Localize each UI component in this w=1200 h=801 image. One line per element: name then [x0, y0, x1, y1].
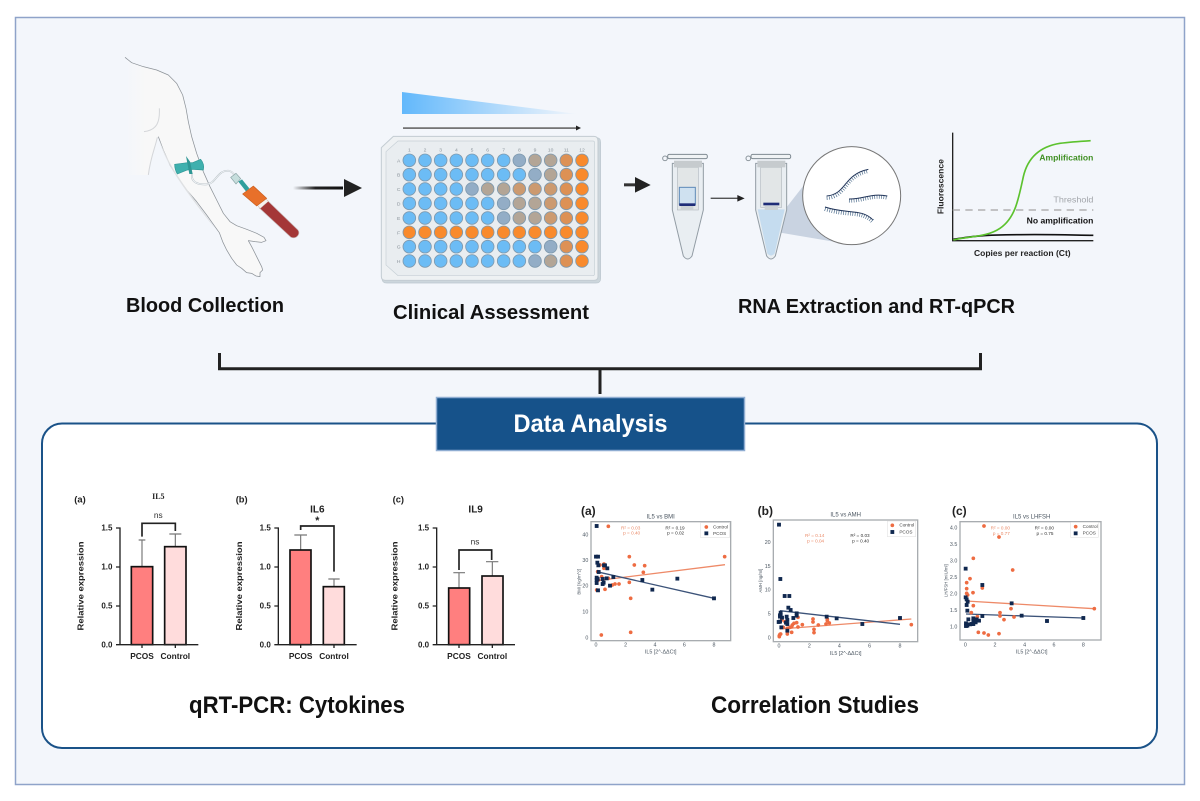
bar chart: IL5: (a): [74, 494, 86, 504]
scatter plot: IL5 vs BMI: 10: [582, 610, 588, 616]
control points: [595, 525, 726, 637]
scatter plot: IL5 vs BMI: 20: [582, 584, 588, 590]
legend: PCOS: [1083, 531, 1096, 536]
plate column numbers: A: [397, 158, 401, 164]
bar chart: IL9: 1.0: [418, 563, 430, 572]
arrow: to first tube: [624, 177, 651, 193]
blood tube: [243, 186, 299, 238]
plate column numbers: 4: [455, 148, 458, 154]
plate column numbers: 10: [548, 148, 554, 154]
heading box: Data Analysis: [436, 398, 744, 450]
scatter plot: IL5 vs LH/FSH: R² = 0.00: [1035, 526, 1054, 531]
magnified RNA circle: [803, 147, 901, 245]
bar chart: IL5: 0.0: [101, 640, 113, 649]
bar chart: IL9: Control: [478, 651, 507, 661]
bar chart: IL9: ns: [471, 536, 479, 546]
magnified view cone: [768, 185, 833, 242]
scatter plot: IL5 vs AMH: IL5 vs AMH: [830, 513, 861, 519]
bar chart: IL6: Control: [319, 651, 349, 661]
legend: [701, 523, 729, 538]
scatter plot: IL5 vs AMH: R² = 0.03: [850, 533, 870, 538]
panel: data analysis: [42, 424, 1157, 748]
PCOS points: [777, 523, 902, 632]
scatter plot: IL5 vs LH/FSH: 3.5: [950, 542, 957, 548]
arm: [125, 57, 266, 277]
bar chart: IL6: 1.5: [260, 524, 271, 533]
PCOS points: [594, 524, 716, 600]
scatter plot: IL5 vs LH/FSH: p = 0.75: [1037, 531, 1054, 536]
scatter plot: IL5 vs AMH: 5: [768, 612, 771, 618]
scatter plot: IL5 vs LH/FSH: [943, 504, 1101, 655]
scatter plot: IL5 vs BMI: 40: [582, 532, 588, 538]
scatter plot: IL5 vs BMI: (a): [581, 504, 596, 518]
heading: qRT-PCR: Cytokines: qRT-PCR: Cytokines: [189, 692, 405, 719]
scatter plot: IL5 vs AMH: (b): [758, 504, 773, 518]
scatter plot: IL5 vs AMH: IL5 [2^-ΔΔCt]: [830, 651, 862, 657]
scatter plot: IL5 vs LH/FSH: IL5 [2^-ΔΔCt]: [1016, 649, 1048, 655]
scatter plot: IL5 vs AMH: 2: [808, 644, 811, 650]
plate column numbers: 7: [502, 148, 505, 154]
plate column numbers: 6: [486, 148, 489, 154]
connector bracket: [220, 353, 980, 394]
chart: qPCR amplification curve: Amplification: [1039, 153, 1093, 162]
bar chart: IL5: 1.5: [101, 524, 113, 533]
scatter plot: IL5 vs LH/FSH: 4.0: [950, 526, 957, 532]
plate column numbers: 9: [534, 148, 537, 154]
PCOS points: [964, 567, 1085, 628]
plate wells: [403, 154, 588, 267]
bar chart: IL5: [74, 492, 198, 661]
scatter plot: IL5 vs AMH: 0: [768, 635, 771, 641]
scatter plot: IL5 vs AMH: 8: [899, 644, 902, 650]
plate column numbers: 2: [424, 148, 427, 154]
scatter plot: IL5 vs BMI: 30: [582, 558, 588, 564]
scatter plot: IL5 vs LH/FSH: 1.0: [950, 624, 957, 630]
scatter plot: IL5 vs BMI: 0: [585, 635, 588, 641]
arrow: dilution direction: [403, 126, 581, 130]
chart: qPCR amplification curve: Threshold: [1053, 196, 1093, 205]
plate column numbers: H: [397, 259, 401, 265]
plate column numbers: B: [397, 173, 401, 179]
legend: PCOS: [713, 531, 726, 536]
bar chart: IL5: Control: [161, 651, 190, 661]
scatter plot: IL5 vs AMH: 20: [765, 540, 771, 546]
scatter plot: IL5 vs BMI: R² = 0.03: [621, 526, 641, 531]
scatter plot: IL5 vs BMI: IL5 vs BMI: [647, 514, 675, 520]
heading: RNA Extraction and RT-qPCR: RNA Extraction and RT-qPCR: [738, 296, 1016, 318]
legend: [887, 521, 916, 537]
arrow: blood collection to assessment: [293, 179, 362, 197]
scatter plot: IL5 vs LH/FSH: 4: [1023, 643, 1026, 649]
bar chart: IL6: 0.5: [260, 602, 271, 611]
spin column tube 1: [663, 154, 707, 259]
scatter plot: IL5 vs BMI: BMI [Kg/m^2]: [576, 569, 581, 595]
scatter plot: IL5 vs AMH: p = 0.04: [807, 538, 825, 543]
bar chart: IL9: PCOS: [447, 651, 471, 661]
scatter plot: IL5 vs AMH: 4: [838, 644, 841, 650]
heading: Blood Collection: Blood Collection: [126, 295, 284, 317]
scatter plot: IL5 vs LH/FSH: 3.0: [950, 559, 957, 565]
butterfly needle: [175, 159, 204, 174]
bar chart: IL6: PCOS: [289, 651, 313, 661]
scatter plot: IL5 vs BMI: [576, 504, 731, 655]
scatter plot: IL5 vs AMH: AMH [ng/ml]: [758, 569, 763, 593]
plate column numbers: C: [397, 187, 401, 193]
icon: dilution gradient triangle: [402, 92, 578, 114]
bar chart: IL9: 0.5: [418, 602, 430, 611]
scatter plot: IL5 vs AMH: [758, 504, 918, 657]
control points: [965, 524, 1096, 637]
scatter plot: IL5 vs AMH: R² = 0.14: [805, 533, 825, 538]
scatter plot: IL5 vs AMH: 15: [765, 564, 771, 570]
bar chart: IL9: 1.5: [418, 524, 430, 533]
heading box: Data Analysis: Data Analysis: [514, 410, 668, 438]
icon: 96-well plate: [381, 136, 601, 283]
plate column numbers: G: [397, 245, 401, 251]
bar chart: IL9: (c): [393, 494, 404, 504]
scatter plot: IL5 vs LH/FSH: 2.0: [950, 592, 957, 598]
scatter plot: IL5 vs AMH: p = 0.40: [852, 538, 870, 543]
scatter plot: IL5 vs BMI: R² = 0.19: [665, 526, 685, 531]
legend: Control: [899, 523, 914, 528]
bar chart: IL5: Relative expression: [76, 541, 86, 630]
bar chart: IL5: PCOS: [130, 651, 154, 661]
icon: RNA extraction tubes: [624, 147, 901, 259]
bar chart: IL6: 0.0: [260, 640, 271, 649]
arrow: between tubes: [711, 195, 745, 202]
plate column numbers: 11: [564, 148, 569, 154]
spin column tube 2 with eluate: [746, 154, 791, 259]
bar chart: IL5: ns: [154, 510, 163, 520]
bar chart: IL9: [389, 494, 515, 661]
scatter plot: IL5 vs BMI: 8: [713, 643, 716, 649]
scatter plot: IL5 vs AMH: 10: [765, 588, 771, 594]
icon: arm with blood collection set: [125, 57, 299, 277]
plate column numbers: F: [397, 230, 400, 236]
scatter plot: IL5 vs LH/FSH: (c): [952, 504, 967, 518]
scatter plot: IL5 vs LH/FSH: 0: [964, 643, 967, 649]
bar chart: IL9: IL9: [468, 505, 483, 516]
bar chart: IL5: 0.5: [101, 602, 113, 611]
scatter plot: IL5 vs LH/FSH: p = 0.77: [993, 531, 1010, 536]
scatter plot: IL5 vs LH/FSH: LH/FSH [mIU/ml]: [943, 564, 948, 597]
holder connector: [231, 173, 241, 184]
heading: Correlation Studies: Correlation Studies: [711, 692, 919, 719]
bar chart: IL5: IL5: [152, 492, 165, 501]
bar chart: IL6: [234, 494, 357, 661]
chart: qPCR amplification curve: Copies per reaction (Ct): [974, 249, 1071, 258]
control points: [778, 616, 913, 638]
legend: Control: [713, 525, 728, 530]
plate column numbers: 12: [579, 148, 585, 154]
plate column numbers: 1: [408, 148, 411, 154]
scatter plot: IL5 vs BMI: p = 0.40: [623, 531, 641, 536]
chart: qPCR amplification curve: [936, 133, 1093, 258]
plate column numbers: 5: [471, 148, 474, 154]
legend: Control: [1083, 524, 1098, 529]
bar chart: IL6: (b): [236, 494, 248, 504]
chart: qPCR amplification curve: No amplification: [1027, 217, 1093, 226]
bar chart: IL9: 0.0: [418, 640, 430, 649]
bar chart: IL6: *: [315, 515, 320, 527]
scatter plot: IL5 vs BMI: p = 0.02: [667, 531, 685, 536]
plate column numbers: D: [397, 201, 401, 207]
plate column numbers: [397, 148, 585, 265]
plate column numbers: 3: [439, 148, 442, 154]
bar chart: IL5: 1.0: [101, 563, 113, 572]
scatter plot: IL5 vs AMH: 6: [868, 644, 871, 650]
scatter plot: IL5 vs BMI: 0: [595, 643, 598, 649]
bar chart: IL6: IL6: [310, 505, 325, 516]
bar chart: IL9: Relative expression: [389, 541, 399, 630]
heading: Clinical Assessment: Clinical Assessment: [393, 302, 589, 324]
chart: qPCR amplification curve: Fluorescence: [936, 159, 945, 214]
scatter plot: IL5 vs BMI: 4: [654, 643, 657, 649]
scatter plot: IL5 vs AMH: 0: [778, 644, 781, 650]
scatter plot: IL5 vs BMI: IL5 [2^-ΔΔCt]: [645, 649, 677, 655]
scatter plot: IL5 vs BMI: 6: [683, 643, 686, 649]
scatter plot: IL5 vs LH/FSH: 2: [994, 643, 997, 649]
scatter plot: IL5 vs LH/FSH: IL5 vs LHFSH: [1013, 514, 1050, 520]
tubing: [192, 171, 236, 184]
legend: PCOS: [899, 530, 913, 535]
bar chart: IL6: 1.0: [260, 563, 271, 572]
bar chart: IL6: Relative expression: [234, 541, 244, 630]
scatter plot: IL5 vs LH/FSH: 2.5: [950, 575, 957, 581]
scatter plot: IL5 vs BMI: 2: [624, 643, 627, 649]
plate column numbers: E: [397, 216, 401, 222]
legend: [1071, 522, 1098, 537]
scatter plot: IL5 vs LH/FSH: 1.5: [950, 608, 957, 614]
scatter plot: IL5 vs LH/FSH: R² = 0.00: [991, 526, 1010, 531]
scatter plot: IL5 vs LH/FSH: 8: [1082, 643, 1085, 649]
scatter plot: IL5 vs LH/FSH: 6: [1053, 643, 1056, 649]
plate column numbers: 8: [518, 148, 521, 154]
